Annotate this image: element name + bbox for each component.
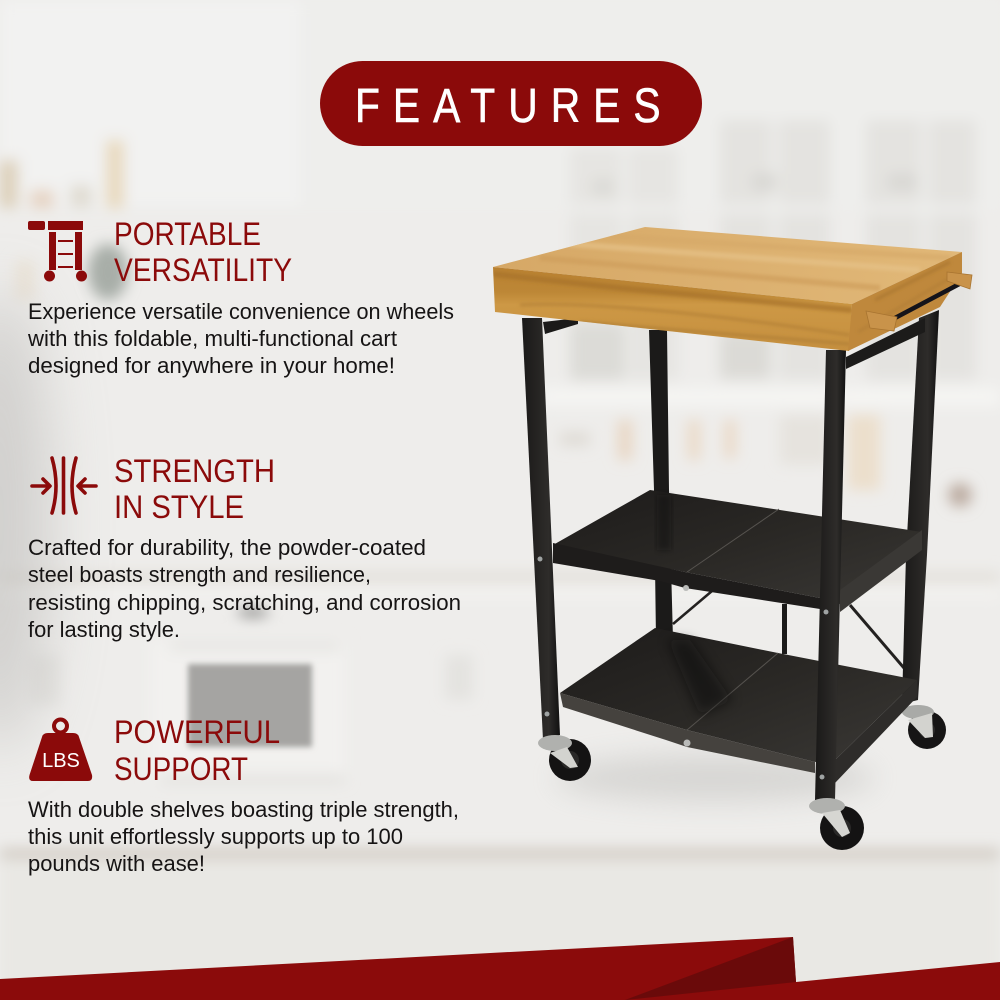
body text <box>27 299 454 378</box>
body text: steel boasts strength and resilience, <box>28 562 371 587</box>
heading <box>114 453 275 525</box>
body text <box>28 797 459 876</box>
floor shadow under cart <box>555 754 875 802</box>
heading: IN STYLE <box>114 489 244 525</box>
bottom ribbon <box>0 937 1000 1000</box>
heading: PORTABLE <box>114 216 261 252</box>
panel: powerful support <box>28 714 459 876</box>
heading: SUPPORT <box>114 751 248 787</box>
body text: this unit effortlessly supports up to 100 <box>28 824 403 849</box>
front casters <box>538 735 864 850</box>
body text: Crafted for durability, the powder-coated <box>28 535 426 560</box>
body text: With double shelves boasting triple strength, <box>28 797 459 822</box>
butcher block top <box>493 227 962 351</box>
icon: folding cart <box>28 221 87 282</box>
body text: with this foldable, multi-functional cart <box>27 326 398 351</box>
product: folding kitchen cart <box>493 227 972 850</box>
lower shelf <box>560 628 917 783</box>
heading <box>114 714 280 787</box>
heading: VERSATILITY <box>114 252 292 288</box>
front legs <box>522 318 925 800</box>
body text: pounds with ease! <box>28 851 205 876</box>
title pill <box>320 61 702 146</box>
icon: LBS weight <box>29 720 92 781</box>
body text: for lasting style. <box>28 617 180 642</box>
heading: STRENGTH <box>114 453 275 489</box>
panel: portable versatility <box>27 216 454 378</box>
icon: compression arrows <box>32 458 96 513</box>
back legs and braces <box>543 310 939 704</box>
panel: strength in style <box>28 453 461 642</box>
upper shelf <box>553 490 922 612</box>
body text: designed for anywhere in your home! <box>28 353 395 378</box>
body text: resisting chipping, scratching, and corrosion <box>28 590 461 615</box>
heading: POWERFUL <box>114 714 280 750</box>
icon: LBS weight: LBS <box>42 750 80 772</box>
back right caster <box>902 705 946 749</box>
heading <box>114 216 292 288</box>
towel bar handle <box>866 272 972 331</box>
body text: Experience versatile convenience on wheels <box>28 299 454 324</box>
title text: FEATURES <box>355 80 674 133</box>
body text <box>28 535 461 642</box>
